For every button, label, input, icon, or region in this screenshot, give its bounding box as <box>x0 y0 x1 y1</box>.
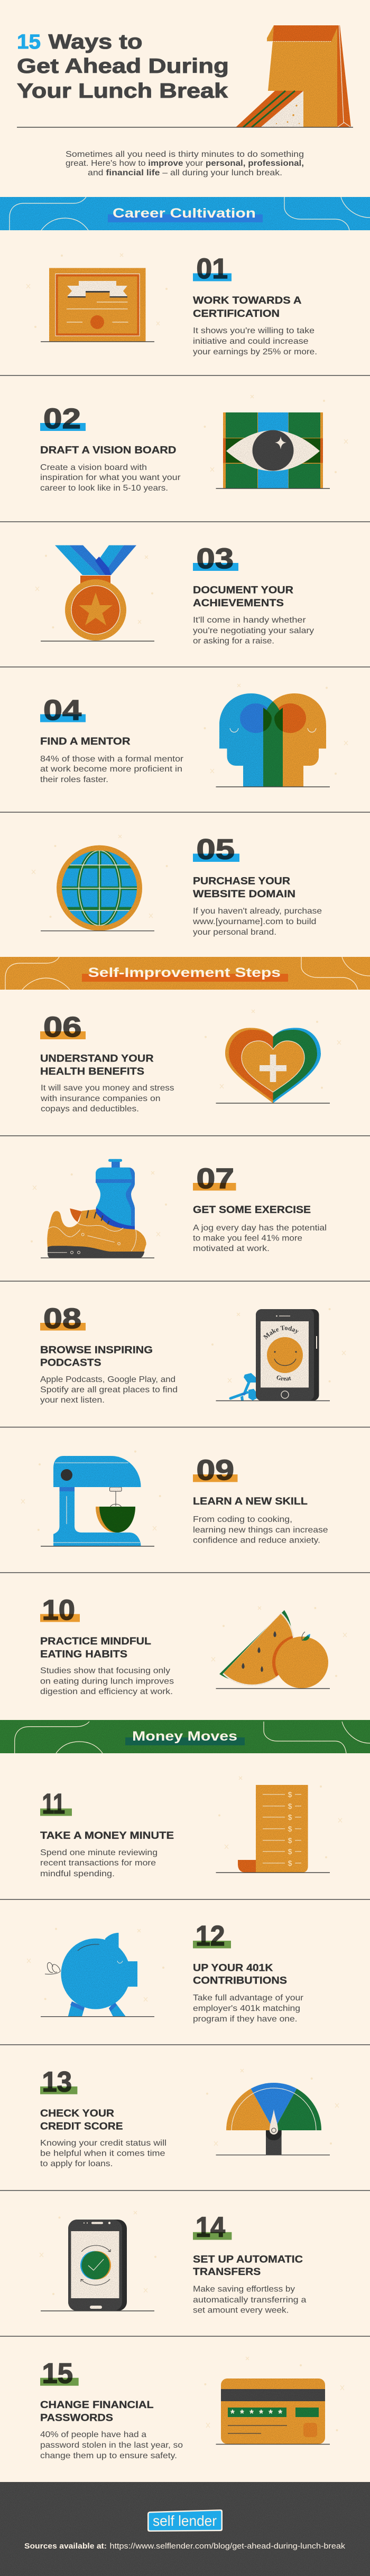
sources text: Sources available at: <box>24 2542 107 2551</box>
body text: with insurance companies on <box>40 1094 161 1103</box>
number 07: 07 <box>197 1163 234 1195</box>
decorative sparkle marks <box>21 253 348 2431</box>
intro text <box>66 150 304 177</box>
body text: inspiration for what you want your <box>40 473 181 482</box>
body text: your next listen. <box>40 1396 105 1405</box>
receipt dollar signs <box>288 1790 292 1867</box>
podcast smiley lettering: Make Today <box>263 1325 299 1340</box>
body text: 40% of people have had a <box>40 2430 146 2439</box>
icon: globe <box>57 845 142 931</box>
body text <box>40 1375 178 1405</box>
panel: item 12 <box>41 1920 304 2024</box>
body text: motivated at work. <box>193 1244 270 1253</box>
panel: item 04 <box>40 693 330 787</box>
logo: self lender: self lender <box>153 2513 217 2529</box>
body text: recent transactions for more <box>40 1859 156 1867</box>
body text: It'll come in handy whether <box>193 616 306 625</box>
heading: PASSWORDS <box>40 2412 113 2424</box>
body text <box>40 1667 174 1696</box>
heading: CREDIT SCORE <box>40 2121 123 2132</box>
number 09: 09 <box>197 1454 234 1486</box>
panel: self-improvement steps banner <box>0 957 370 990</box>
heading: PODCASTS <box>40 1357 101 1368</box>
heading: HEALTH BENEFITS <box>40 1066 144 1077</box>
body text <box>40 463 181 493</box>
body text: set amount every week. <box>193 2306 289 2315</box>
receipt dollar signs: $ <box>288 1836 292 1845</box>
title <box>17 31 229 102</box>
panel: money moves banner <box>0 1720 370 1753</box>
panel: item 03 <box>41 543 314 645</box>
receipt dollar signs: $ <box>288 1859 292 1867</box>
body text: program if they have one. <box>193 2015 297 2024</box>
heading: FIND A MENTOR <box>40 736 130 747</box>
number 12: 12 <box>196 1920 225 1952</box>
heading <box>40 1053 154 1077</box>
body text: If you haven't already, purchase <box>193 907 322 916</box>
body text: initiative and could increase <box>193 337 309 346</box>
heading: PURCHASE YOUR <box>193 876 290 887</box>
title: Your Lunch Break <box>17 80 228 102</box>
body text: It will save you money and stress <box>41 1084 174 1093</box>
body text: It shows you're willing to take <box>193 326 314 335</box>
body text: digestion and efficiency at work. <box>40 1687 173 1696</box>
receipt dollar signs: $ <box>288 1790 292 1799</box>
heading <box>193 584 293 609</box>
panel: item 09 <box>41 1454 328 1546</box>
body text: to make you feel 41% more <box>193 1234 302 1243</box>
icon: piggy bank <box>45 1933 137 2017</box>
body text: confidence and reduce anxiety. <box>193 1536 320 1545</box>
panel: item 06 <box>40 1011 330 1113</box>
heading <box>193 295 301 319</box>
body text: at work become more proficient in <box>40 765 182 774</box>
number 02: 02 <box>43 403 81 435</box>
receipt dollar signs: $ <box>288 1813 292 1821</box>
heading: DOCUMENT YOUR <box>193 584 293 596</box>
body text: From coding to cooking, <box>193 1515 292 1524</box>
body text: 84% of those with a formal mentor <box>40 755 184 764</box>
panel: item 15 <box>40 2358 330 2460</box>
panel: self-improvement steps banner: Self-Improvement Steps <box>88 965 281 980</box>
number 11: 11 <box>42 1788 65 1820</box>
intro text: great. Here's how to improve your personal, professional, <box>66 159 304 168</box>
number 03 <box>193 543 238 575</box>
heading: CHECK YOUR <box>40 2108 114 2119</box>
heading: UNDERSTAND YOUR <box>40 1053 154 1065</box>
number 13: 13 <box>42 2066 72 2098</box>
icon: watermelon and orange <box>219 1610 328 1690</box>
number 08 <box>40 1303 86 1334</box>
number 06 <box>40 1011 86 1043</box>
heading: BROWSE INSPIRING <box>40 1345 153 1356</box>
number 04 <box>40 694 86 726</box>
heading: PRACTICE MINDFUL <box>40 1635 151 1647</box>
receipt dollar signs: $ <box>288 1825 292 1833</box>
heading: WORK TOWARDS A <box>193 295 301 306</box>
body text: be helpful when it comes time <box>40 2149 165 2158</box>
heading <box>40 2399 154 2424</box>
icon: lunch bag and sandwich <box>236 25 351 127</box>
panel: money moves banner: Money Moves <box>132 1729 237 1744</box>
panel: footer <box>0 2482 370 2576</box>
panel: career cultivation banner: Career Cultivation <box>113 206 256 221</box>
intro text: and financial life – all during your lunch break. <box>88 168 282 177</box>
heading: CONTRIBUTIONS <box>193 1975 287 1987</box>
body text: Create a vision board with <box>40 463 147 472</box>
body text: you're negotiating your salary <box>193 626 314 635</box>
title: 15 <box>17 31 41 53</box>
body text: on eating during lunch improves <box>40 1677 174 1686</box>
logo: self lender <box>147 2509 223 2532</box>
number 10: 10 <box>42 1594 75 1626</box>
panel: item 05 <box>41 833 322 937</box>
body text <box>192 907 322 937</box>
body text <box>40 2139 166 2168</box>
header ground line <box>17 127 353 128</box>
body text: your earnings by 25% or more. <box>193 347 317 356</box>
body text <box>193 326 317 356</box>
heading: WEBSITE DOMAIN <box>193 888 295 900</box>
heading <box>193 876 295 900</box>
heading: SET UP AUTOMATIC <box>193 2253 303 2265</box>
body text: A jog every day has the potential <box>193 1224 327 1233</box>
heading: CHANGE FINANCIAL <box>40 2399 154 2411</box>
body text: automatically transferring a <box>193 2296 307 2305</box>
number 05: 05 <box>197 833 235 865</box>
body text <box>40 1084 174 1113</box>
body text: www.[yourname].com to build <box>192 917 316 926</box>
icon: credit card <box>221 2378 325 2444</box>
body text: career to look like in 5-10 years. <box>40 484 168 493</box>
body text <box>193 1994 304 2024</box>
podcast smiley lettering <box>263 1325 299 1380</box>
number 03: 03 <box>197 543 234 575</box>
body text: learning new things can increase <box>193 1526 328 1535</box>
number 15: 15 <box>42 2358 73 2390</box>
body text: Studies show that focusing only <box>40 1667 170 1676</box>
body text <box>40 755 184 784</box>
panel: item 08 <box>40 1303 330 1405</box>
body text: or asking for a raise. <box>193 637 274 645</box>
icon: phone with smiley and dumbbells <box>230 1309 319 1400</box>
body text: Take full advantage of your <box>193 1994 304 2002</box>
body text: Make saving effortless by <box>193 2285 295 2294</box>
body text <box>193 2285 307 2315</box>
panel: item 02 <box>40 403 330 493</box>
panel: item 14 <box>41 2212 307 2315</box>
intro text: Sometimes all you need is thirty minutes to do something <box>66 150 304 159</box>
heading: CERTIFICATION <box>193 308 280 319</box>
number 08: 08 <box>43 1303 81 1334</box>
heading: ACHIEVEMENTS <box>193 597 284 609</box>
title: Ways to <box>49 31 143 53</box>
number 02 <box>40 403 86 435</box>
body text <box>193 1224 327 1253</box>
number 14: 14 <box>196 2212 225 2243</box>
body text <box>40 2430 183 2460</box>
icon: credit score gauge <box>226 2083 321 2155</box>
heading: LEARN A NEW SKILL <box>193 1496 308 1507</box>
icon: phone with check mark <box>68 2220 127 2311</box>
icon: stand mixer <box>53 1456 141 1546</box>
body text: your personal brand. <box>193 928 276 937</box>
title: Get Ahead During <box>17 55 229 78</box>
body text <box>193 1515 328 1545</box>
panel: item 11 <box>40 1785 330 1878</box>
number 06: 06 <box>43 1011 81 1043</box>
heading: TAKE A MONEY MINUTE <box>40 1830 174 1841</box>
sources text: https://www.selflender.com/blog/get-ahead-during-lunch-break <box>110 2542 346 2551</box>
heading <box>193 1962 287 1987</box>
heading: EATING HABITS <box>40 1649 127 1660</box>
icon: medal <box>55 545 136 641</box>
number 05 <box>193 833 239 865</box>
body text: mindful spending. <box>40 1869 115 1878</box>
body text <box>40 1848 158 1878</box>
panel: item 01 <box>41 253 317 356</box>
panel: career cultivation banner <box>0 197 370 230</box>
password asterisks: ****** <box>230 2408 282 2420</box>
heading: GET SOME EXERCISE <box>193 1204 311 1216</box>
number 04: 04 <box>43 694 81 726</box>
podcast smiley lettering: Great <box>276 1375 291 1380</box>
body text: Apple Podcasts, Google Play, and <box>40 1375 175 1384</box>
number 01: 01 <box>197 253 228 285</box>
sources text <box>24 2542 346 2551</box>
body text: their roles faster. <box>40 775 108 784</box>
body text: copays and deductibles. <box>41 1105 139 1113</box>
body text: change them up to ensure safety. <box>40 2451 177 2460</box>
body text: Spotify are all great places to find <box>40 1385 178 1394</box>
icon: receipt <box>238 1785 308 1873</box>
receipt dollar signs: $ <box>288 1847 292 1856</box>
body text: to apply for loans. <box>40 2159 113 2168</box>
heading <box>40 1635 151 1660</box>
panel: item 13 <box>40 2066 330 2168</box>
body text: employer's 401k matching <box>193 2004 300 2013</box>
heading <box>193 2253 303 2278</box>
body text: password stolen in the last year, so <box>40 2441 183 2450</box>
icon: vision board eye <box>223 412 323 488</box>
icon: two heads <box>219 693 326 787</box>
heading: UP YOUR 401K <box>193 1962 273 1974</box>
icon: certificate <box>49 268 146 342</box>
body text: Knowing your credit status will <box>40 2139 166 2148</box>
icon: heart with plus <box>225 1028 321 1103</box>
panel: item 07 <box>41 1159 327 1258</box>
heading: TRANSFERS <box>193 2266 261 2278</box>
heading <box>40 1345 153 1368</box>
panel: item 10 <box>40 1594 330 1696</box>
heading <box>40 2108 123 2132</box>
body text: Spend one minute reviewing <box>40 1848 158 1857</box>
icon: bottle on shoe <box>47 1159 146 1258</box>
heading: DRAFT A VISION BOARD <box>40 445 177 456</box>
body text <box>193 616 314 645</box>
receipt dollar signs: $ <box>288 1802 292 1810</box>
